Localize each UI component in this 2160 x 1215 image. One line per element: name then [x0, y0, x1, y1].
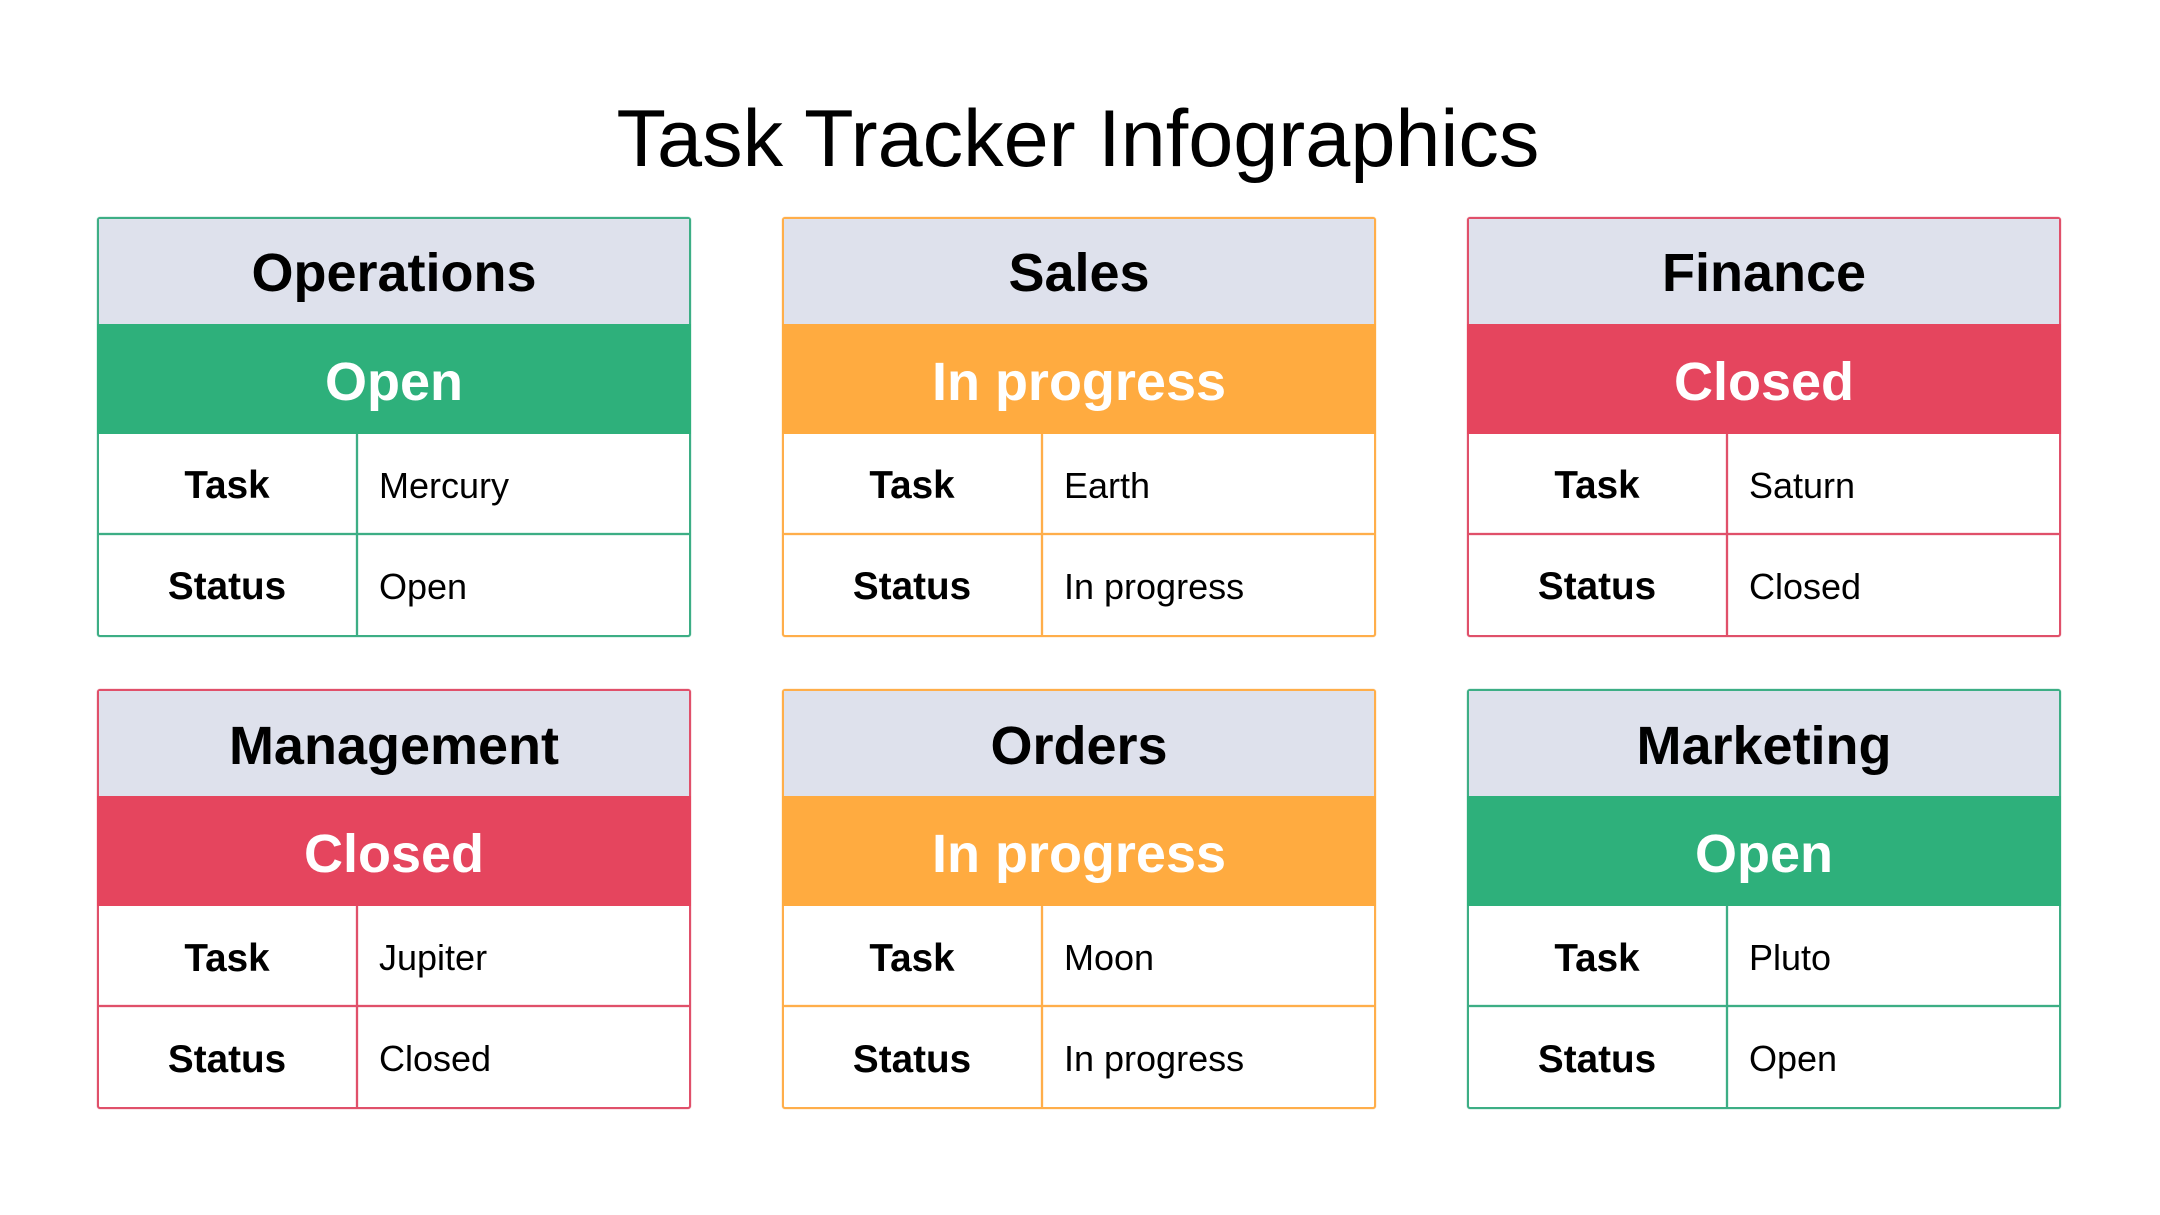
row: status: Closed — [379, 1038, 491, 1079]
row: status: Status — [1538, 565, 1656, 608]
row: task: Task — [1554, 464, 1640, 507]
panel: Management — [97, 689, 691, 1109]
row: task: Mercury — [379, 465, 509, 506]
row: task — [184, 937, 487, 980]
status band: Closed — [97, 796, 691, 906]
row: task — [1554, 464, 1855, 507]
heading: Marketing: Marketing — [1636, 716, 1892, 776]
heading: Sales — [784, 219, 1374, 324]
row: status: In progress — [1064, 1038, 1244, 1079]
row: task: Task — [869, 464, 955, 507]
status band: Open: Open — [325, 352, 463, 412]
row: status: Closed — [1749, 566, 1861, 607]
row: task — [1554, 937, 1831, 980]
row: status — [853, 1038, 1244, 1081]
row: status: Status — [853, 565, 971, 608]
row: status: Status — [168, 1038, 286, 1081]
row: task — [869, 937, 1154, 980]
status band: Open: Open — [1695, 824, 1833, 884]
status band: In progress: In progress — [932, 352, 1226, 412]
status band: Closed: Closed — [304, 824, 484, 884]
heading: Management — [99, 691, 689, 796]
row: task: Task — [1554, 937, 1640, 980]
status band: In progress — [782, 796, 1376, 906]
panel: Sales — [782, 217, 1376, 637]
heading: Operations — [99, 219, 689, 324]
status band: In progress: In progress — [932, 824, 1226, 884]
row: status — [168, 565, 467, 608]
heading: Operations: Operations — [251, 243, 537, 303]
panel: Finance — [1467, 217, 2061, 637]
row: status: Open — [1749, 1038, 1837, 1079]
row: status — [1538, 565, 1861, 608]
title: Task Tracker Infographics — [617, 94, 1539, 184]
status band: Open — [1467, 796, 2061, 906]
row: status — [1538, 1038, 1837, 1081]
heading: Sales: Sales — [1008, 243, 1150, 303]
row: task — [869, 464, 1150, 507]
panel: Marketing — [1467, 689, 2061, 1109]
row: task: Jupiter — [379, 937, 487, 978]
panel: Operations — [97, 217, 691, 637]
row: task: Task — [869, 937, 955, 980]
heading: Management: Management — [229, 716, 559, 776]
heading: Marketing — [1469, 691, 2059, 796]
heading: Orders: Orders — [990, 716, 1168, 776]
heading: Finance — [1469, 219, 2059, 324]
row: status: Status — [1538, 1038, 1656, 1081]
status band: Closed: Closed — [1674, 352, 1854, 412]
status band: In progress — [782, 324, 1376, 434]
panel: Orders — [782, 689, 1376, 1109]
status band: Open — [97, 324, 691, 434]
heading: Orders — [784, 691, 1374, 796]
row: task: Saturn — [1749, 465, 1855, 506]
row: task — [184, 464, 509, 507]
row: status: Status — [168, 565, 286, 608]
heading: Finance: Finance — [1662, 243, 1866, 303]
row: status — [853, 565, 1244, 608]
row: task: Pluto — [1749, 937, 1831, 978]
status band: Closed — [1467, 324, 2061, 434]
row: task: Task — [184, 464, 270, 507]
row: status: In progress — [1064, 566, 1244, 607]
row: status: Open — [379, 566, 467, 607]
row: task: Moon — [1064, 937, 1154, 978]
row: status: Status — [853, 1038, 971, 1081]
row: task: Earth — [1064, 465, 1150, 506]
row: status — [168, 1038, 491, 1081]
row: task: Task — [184, 937, 270, 980]
